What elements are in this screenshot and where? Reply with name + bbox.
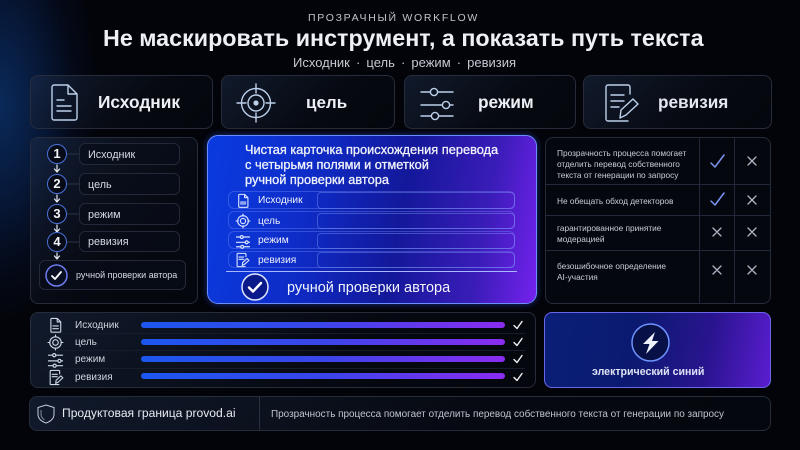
row 4 text: безошибочное определение xyxy=(557,261,666,271)
row 1 marks xyxy=(710,154,757,168)
label: цель xyxy=(258,216,280,227)
confirmation label: ручной проверки автора xyxy=(287,280,450,296)
row 3 text: модерацией xyxy=(557,234,604,244)
title: Не маскировать инструмент, а показать путь текста xyxy=(103,25,704,51)
step arrows xyxy=(54,154,79,260)
icon: document with pencil xyxy=(50,370,64,386)
panel: steps xyxy=(30,137,198,304)
row 3 text: гарантированное принятие xyxy=(557,223,661,233)
step 3 xyxy=(47,204,67,224)
card: цель xyxy=(221,75,395,129)
step 4: 4 xyxy=(53,234,61,249)
label: ревизия xyxy=(75,372,113,383)
subtitle: Исходник · цель · режим · ревизия xyxy=(293,55,516,70)
empty field xyxy=(317,252,515,268)
heading: с четырьмя полями и отметкой xyxy=(245,157,429,172)
row: режим xyxy=(228,231,515,249)
step 1: 1 xyxy=(53,146,61,161)
icon xyxy=(236,235,250,249)
statement: Прозрачность процесса помогает отделить перевод собственного текста от генерации по запросу xyxy=(271,409,724,420)
label: цель xyxy=(75,337,97,348)
label: Исходник xyxy=(98,92,180,112)
row 3 marks xyxy=(712,227,757,237)
icon: shield xyxy=(38,404,54,424)
field 1: Исходник xyxy=(88,149,135,161)
icon: document xyxy=(51,84,78,121)
field 3: режим xyxy=(88,209,121,221)
bar 1 xyxy=(141,322,505,328)
step 3: 3 xyxy=(53,206,61,221)
row 2 marks xyxy=(710,192,757,206)
label: Исходник xyxy=(258,195,303,206)
field 1 xyxy=(79,143,180,165)
heading: ручной проверки автора xyxy=(245,172,389,187)
divider xyxy=(259,397,260,430)
field 2: цель xyxy=(88,179,112,191)
label: ручной проверки автора xyxy=(76,270,177,280)
empty field xyxy=(317,192,515,209)
row 2 text: Не обещать обход детекторов xyxy=(557,196,673,206)
panel: electric blue xyxy=(544,312,771,388)
row 4 text xyxy=(557,261,666,282)
label: цель xyxy=(306,93,347,112)
row dividers xyxy=(47,333,525,369)
label: ревизия xyxy=(658,92,728,112)
icon: sliders xyxy=(420,88,454,120)
heading xyxy=(245,142,498,187)
icon: check circle xyxy=(45,264,68,287)
empty field xyxy=(317,233,515,249)
icon: document with pencil xyxy=(605,84,639,122)
row: Исходник xyxy=(228,191,515,209)
manual check row xyxy=(39,260,186,290)
field 2 xyxy=(79,173,180,195)
card: режим xyxy=(404,75,576,129)
row dividers and columns xyxy=(546,138,770,303)
heading: Чистая карточка происхождения перевода xyxy=(245,142,498,157)
panel: product boundary xyxy=(29,396,771,431)
icon: lightning in circle xyxy=(631,323,670,362)
step 4 xyxy=(47,232,67,252)
label: режим xyxy=(258,235,289,246)
panel: progress bars xyxy=(30,312,536,388)
label: Продуктовая граница provod.ai xyxy=(62,406,236,420)
label: ревизия xyxy=(258,255,296,266)
step 2: 2 xyxy=(53,176,61,191)
bar 2 xyxy=(141,339,505,345)
row: цель xyxy=(228,211,515,229)
icon: target xyxy=(48,334,64,350)
eyebrow: ПРОЗРАЧНЫЙ WORKFLOW xyxy=(308,12,479,24)
row 1 text: Прозрачность процесса помогает xyxy=(557,148,686,158)
icon: target xyxy=(236,83,276,123)
row: ревизия xyxy=(228,251,515,268)
icon: check circle xyxy=(241,273,269,301)
card: Исходник xyxy=(30,75,213,129)
row 4 text: AI-участия xyxy=(557,272,598,282)
label: режим xyxy=(478,92,534,112)
row 1 text: текста от генерации по запросу xyxy=(557,170,678,180)
empty field xyxy=(317,213,515,229)
card: ревизия xyxy=(583,75,772,129)
icon xyxy=(238,194,248,208)
check marks xyxy=(513,320,523,382)
icon: document xyxy=(50,318,62,333)
row 4 marks xyxy=(712,265,757,275)
icon xyxy=(236,214,250,228)
field 4 xyxy=(79,231,180,252)
label: электрический синий xyxy=(592,366,704,378)
step 2 xyxy=(47,174,67,194)
label: режим xyxy=(75,354,105,365)
label: Исходник xyxy=(75,320,119,331)
panel: comparison table xyxy=(545,137,771,304)
divider line xyxy=(226,271,517,272)
field 3 xyxy=(79,203,180,225)
step 1 xyxy=(47,144,67,164)
bar 3 xyxy=(141,356,505,362)
field 4: ревизия xyxy=(88,236,129,248)
icon: sliders xyxy=(48,353,64,368)
bar 4 xyxy=(141,373,505,379)
row 1 text xyxy=(557,148,686,180)
panel: provenance card xyxy=(207,135,537,304)
icon xyxy=(236,252,250,268)
row 3 text xyxy=(557,223,661,244)
row 1 text: отделить перевод собственного xyxy=(557,159,680,169)
